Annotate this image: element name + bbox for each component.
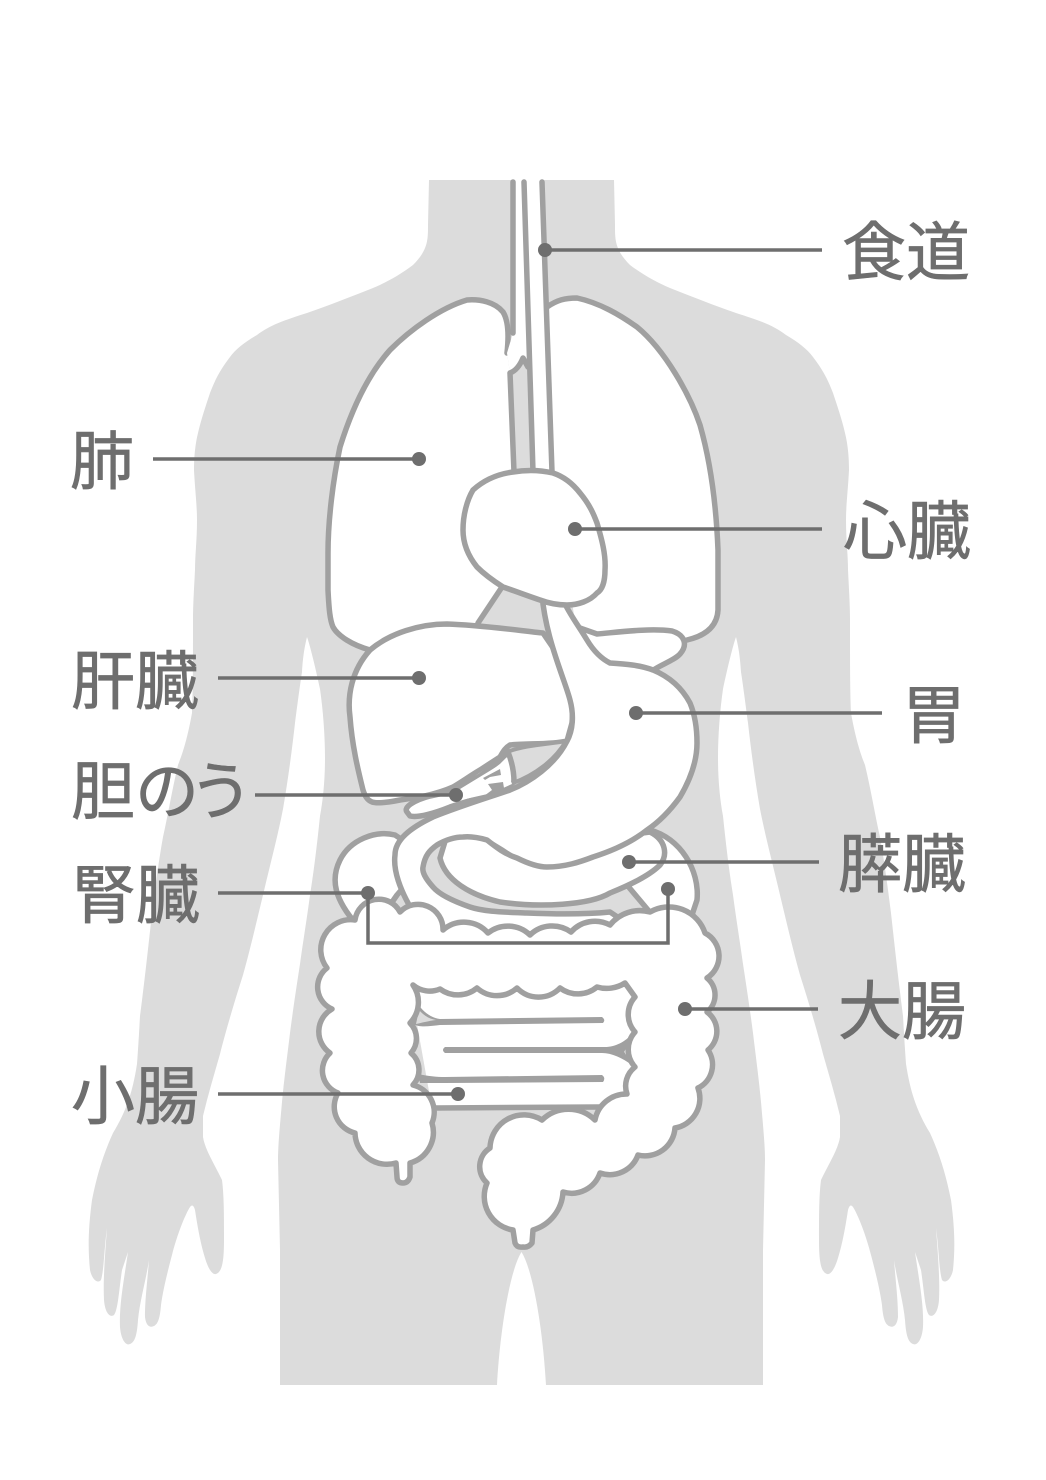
label: lungs bbox=[70, 426, 426, 498]
liver bbox=[349, 624, 575, 803]
right lung bbox=[547, 298, 718, 640]
liver left lobe bbox=[577, 627, 684, 671]
label: small intestine: 小腸 bbox=[71, 1061, 199, 1133]
small intestine bbox=[410, 985, 638, 1108]
pancreas bbox=[440, 825, 665, 905]
stomach and duodenum bbox=[395, 595, 697, 945]
label: liver: 肝臓 bbox=[71, 646, 199, 718]
colon bbox=[318, 899, 719, 1247]
esophagus bbox=[524, 180, 552, 472]
heart bbox=[463, 471, 605, 605]
label: pancreas bbox=[622, 829, 966, 901]
label: kidneys with bracket: 腎臓 bbox=[72, 860, 200, 932]
label: gall bladder: 胆のう bbox=[71, 756, 253, 828]
label: small intestine bbox=[71, 1061, 465, 1133]
label: gall bladder bbox=[71, 756, 463, 828]
label: heart: 心臓 bbox=[843, 496, 971, 568]
label: heart bbox=[568, 496, 971, 568]
label: esophagus: 食道 bbox=[842, 217, 970, 289]
label: large intestine: 大腸 bbox=[838, 976, 966, 1048]
label: stomach bbox=[629, 680, 966, 752]
label: pancreas: 膵臓 bbox=[838, 829, 966, 901]
right kidney bbox=[627, 830, 697, 925]
label: liver bbox=[71, 646, 426, 718]
label: large intestine bbox=[678, 976, 966, 1048]
left kidney bbox=[335, 834, 410, 925]
label: lungs: 肺 bbox=[70, 426, 134, 498]
gall bladder and bile ducts bbox=[406, 741, 566, 816]
trachea bbox=[507, 180, 528, 472]
label: esophagus bbox=[538, 217, 970, 289]
body silhouette bbox=[89, 180, 954, 1385]
left lung bbox=[328, 300, 515, 650]
pancreas edge detail bbox=[487, 838, 522, 860]
label: stomach: 胃 bbox=[902, 680, 966, 752]
label: kidneys with bracket bbox=[72, 860, 675, 943]
